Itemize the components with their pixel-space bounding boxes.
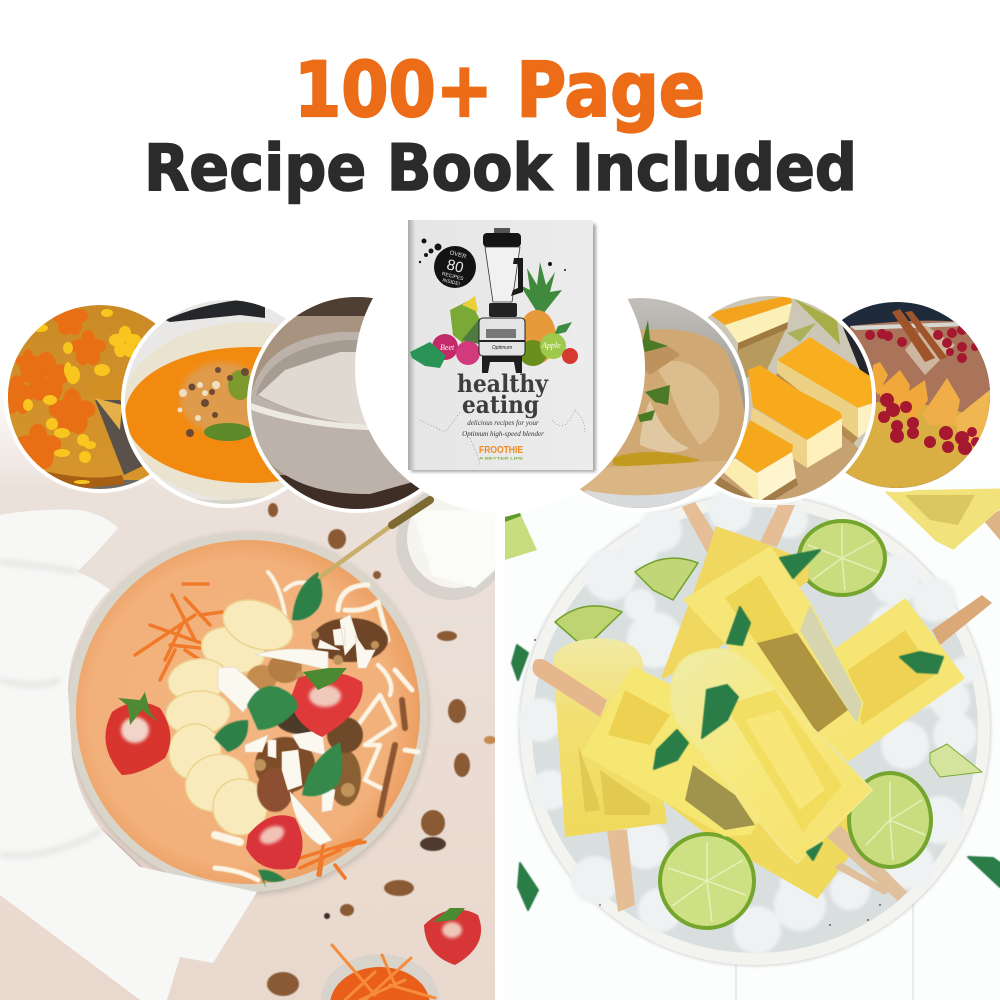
mint leaves bbox=[214, 572, 342, 888]
book subtitle: Optimum high-speed blender bbox=[462, 430, 544, 438]
carrot shreds on bowl bbox=[135, 584, 365, 878]
banana slices bbox=[164, 591, 300, 835]
circle: orange cheesecake bbox=[708, 296, 876, 504]
ink splatter bbox=[419, 238, 566, 271]
bottom carrot bowl bbox=[321, 945, 439, 1000]
badge: over 80 recipes: RECIPES bbox=[441, 271, 465, 282]
badge: over 80 recipes bbox=[434, 246, 476, 288]
popsicle G bottom bbox=[667, 800, 865, 897]
small yogurt bowl bbox=[396, 492, 495, 600]
ingredient labels: Beet bbox=[440, 343, 455, 352]
ice cubes bbox=[518, 488, 979, 954]
lime bottom left bbox=[658, 832, 756, 930]
left photo: smoothie bowl bbox=[0, 380, 508, 1000]
badge: over 80 recipes: 80 bbox=[445, 256, 465, 277]
coconut flakes bbox=[218, 615, 375, 845]
book title: healthy bbox=[457, 369, 549, 398]
mint splash bbox=[410, 342, 446, 368]
right slice bbox=[777, 337, 873, 408]
plate bbox=[519, 494, 991, 966]
right photo: popsicles on ice bbox=[505, 480, 1000, 1000]
popsicle B bbox=[583, 668, 770, 835]
top slice bbox=[708, 295, 792, 325]
pineapple bbox=[518, 262, 572, 364]
strawberries bbox=[105, 668, 481, 965]
book logo bbox=[479, 445, 524, 460]
circle: flower cake bbox=[4, 305, 156, 493]
book logo: A BETTER LIFE bbox=[479, 456, 524, 460]
lime wedges bbox=[555, 558, 982, 777]
subtitle: Recipe Book Included: Recipe Book Included bbox=[144, 132, 857, 206]
bottom slice bbox=[735, 420, 793, 473]
middle slice bbox=[748, 365, 842, 440]
kiwi and apple bbox=[519, 333, 578, 366]
badge: over 80 recipes: INSIDE! bbox=[442, 277, 461, 288]
lime right bbox=[847, 771, 933, 869]
book title: eating bbox=[462, 390, 539, 419]
spoon bbox=[320, 500, 430, 577]
popsicle sticks bbox=[607, 502, 992, 912]
popsicle D top bbox=[685, 548, 862, 740]
stick under centre pop bbox=[827, 825, 907, 901]
book title bbox=[457, 369, 549, 419]
title: 100+ Page: 100+ Page bbox=[294, 45, 705, 134]
smoothie bowl bbox=[67, 532, 481, 965]
popsicle C centre bbox=[670, 649, 872, 863]
book subtitle: delicious recipes for your bbox=[467, 419, 539, 427]
circle: carrot soup bbox=[121, 300, 288, 508]
recipe book bbox=[408, 220, 596, 472]
towel bbox=[0, 510, 257, 1000]
circle: hummus bbox=[530, 294, 750, 515]
blender bbox=[479, 228, 525, 373]
beets bbox=[432, 334, 480, 365]
lime: top right bbox=[797, 519, 887, 597]
book subtitle bbox=[462, 419, 544, 438]
ingredient labels: Apple bbox=[541, 341, 561, 350]
dotted curls bbox=[420, 410, 585, 466]
top right popsicle bbox=[887, 490, 1000, 548]
centre white circle bbox=[355, 223, 645, 513]
popsicle E right bbox=[828, 600, 963, 760]
plank lines bbox=[736, 903, 913, 1000]
beet leaves bbox=[450, 296, 483, 345]
granola crumbs bbox=[267, 503, 496, 996]
book logo: FROOTHIE bbox=[479, 445, 523, 456]
mint leaves bbox=[512, 550, 1000, 910]
ingredient labels bbox=[440, 341, 561, 352]
stick of popsicle B bbox=[532, 659, 607, 717]
circle: flour bowl bbox=[247, 297, 423, 513]
granola clusters bbox=[247, 618, 388, 812]
cream and nut-butter drizzle bbox=[215, 572, 418, 880]
popsicle F back bbox=[663, 528, 807, 677]
blender: Optimum bbox=[492, 345, 512, 351]
popsicle A left bbox=[553, 638, 667, 837]
badge: over 80 recipes: OVER bbox=[449, 250, 468, 260]
corner lime wedge bbox=[505, 513, 537, 560]
circle: pudding with pomegranate bbox=[842, 302, 990, 492]
